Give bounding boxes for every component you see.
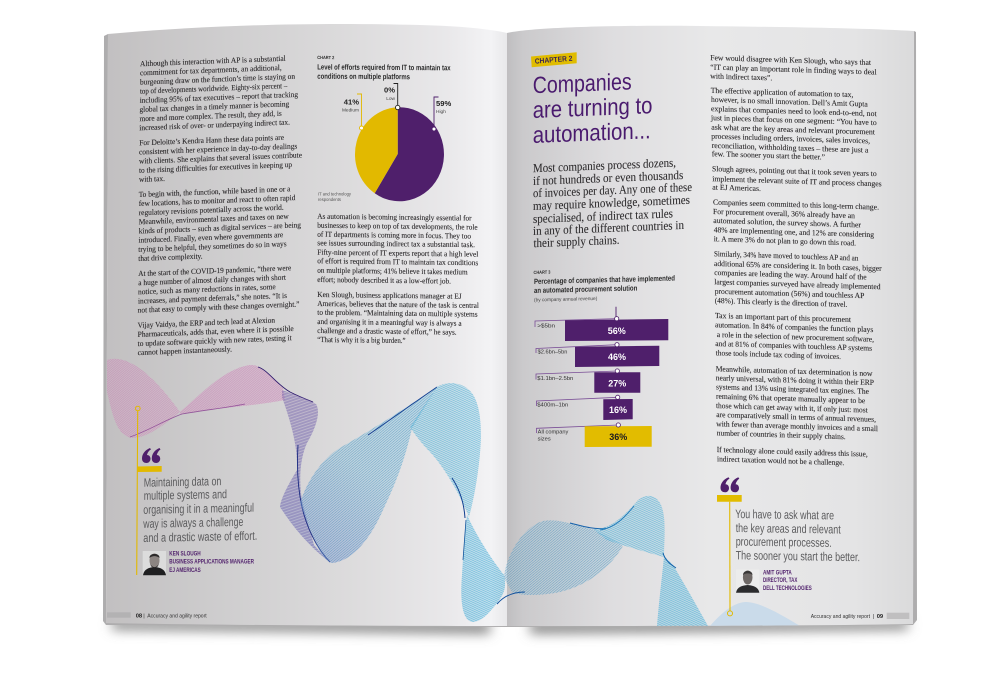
ribbon: descending band to page foot bbox=[657, 553, 708, 626]
chapter heading bbox=[533, 68, 652, 148]
bar: $1.1bn-2.5bn 27%: $1.1bn–2.5bn bbox=[537, 376, 573, 382]
portrait: Ken Slough bbox=[143, 551, 166, 575]
footer: page 08: Accuracy and agility report bbox=[147, 613, 207, 619]
attribution: Amit Gupta: DELL TECHNOLOGIES bbox=[763, 585, 812, 592]
bar: >$5bn 56%: >$5bn bbox=[537, 324, 555, 330]
paragraph: tax determination: Meanwhile, automation of tax determination is now bbox=[716, 364, 873, 378]
paragraph: monitoring revisions: that drive complexity. bbox=[138, 252, 203, 263]
callout: 0% low: 0% bbox=[384, 86, 395, 94]
paragraph: Slough agrees: at EJ Americas. bbox=[712, 183, 761, 193]
bar: $400m-1bn 16% bbox=[536, 395, 633, 420]
ribbon: blue top hump bbox=[410, 383, 481, 518]
paragraph: touchless AP: companies are leading the way. Around half of the bbox=[714, 268, 867, 282]
chart 2 footnote: IT and technology bbox=[318, 192, 352, 196]
bar: >$5bn 56%: 56% bbox=[608, 326, 626, 336]
callout: 0% low bbox=[384, 84, 400, 110]
attribution: Amit Gupta: DIRECTOR, TAX bbox=[763, 577, 798, 584]
page stack edges bbox=[103, 31, 917, 627]
paragraph: technology alone bbox=[717, 445, 868, 468]
chapter heading: are turning to bbox=[533, 92, 652, 123]
pie: medium 41% bbox=[355, 107, 398, 193]
paragraph: tax determination: those which can get away with it, if only just: most bbox=[716, 401, 868, 415]
paragraph: Kendra Hann bbox=[139, 132, 303, 184]
chart 3: funnel bars bbox=[534, 267, 675, 447]
paragraph: Slough agrees bbox=[712, 164, 882, 197]
paragraph: role of IT: Fifty-nine percent of IT experts report that a high level bbox=[317, 248, 479, 259]
footer: page 08 bbox=[107, 612, 207, 620]
paragraph: COVID-19: a huge number of almost daily changes with short bbox=[138, 273, 287, 287]
attribution: Ken Slough: BUSINESS APPLICATIONS MANAGER bbox=[169, 558, 254, 566]
paragraph: Ken Slough: Americas, believes that the nature of the task is central bbox=[317, 299, 480, 310]
paragraph: draw on time: increased risk of over- or underpaying indirect tax. bbox=[139, 118, 290, 132]
paragraph: Vijay Vaidya: Pharmaceuticals, adds that, even where it is possible bbox=[138, 324, 294, 339]
paragraph: monitoring revisions: kinds of products – such as digital services – are being bbox=[139, 220, 301, 236]
icon: quotation marks bbox=[142, 448, 160, 463]
ribbon: large blue lobe bbox=[300, 387, 437, 563]
paragraph: tax determination: systems and 13% using integrated tax engines. The bbox=[716, 382, 870, 396]
paragraph: Vijay Vaidya: Vijay Vaidya, the ERP and tech lead at Alexion bbox=[138, 316, 275, 330]
bar: $2.6bn-5bn 46%: $2.6bn–5bn bbox=[538, 350, 568, 356]
ribbon: pink left lobe bbox=[107, 359, 180, 438]
attribution: Ken Slough bbox=[169, 551, 254, 574]
ribbon: pink upper hump bbox=[130, 365, 313, 437]
callout: 41% medium bbox=[342, 94, 364, 130]
chart 3 heading: CHART 3 bbox=[534, 270, 551, 275]
ribbon: lower spine lobe bbox=[461, 515, 505, 622]
bar: all company sizes 36%: 36% bbox=[609, 432, 627, 442]
paragraph: Vijay Vaidya: to update software quickly with new rates, testing it bbox=[138, 333, 292, 348]
bar: $400m-1bn 16%: $400m–1bn bbox=[537, 402, 568, 408]
quote text: procurement processes. bbox=[736, 535, 832, 550]
paragraph: COVID-19: increases, and payment deferrals,” she notes. “It is bbox=[138, 291, 287, 306]
chart 2 heading: conditions on multiple platforms bbox=[317, 72, 410, 81]
paragraph: tax in procurement bbox=[715, 311, 874, 362]
chapter heading: automation... bbox=[533, 117, 651, 148]
paragraph: draw on time: Although this interaction with AP is a substantial bbox=[140, 54, 286, 68]
quote text: and a drastic waste of effort. bbox=[143, 529, 257, 545]
footer: page 09: Accuracy and agility report bbox=[811, 614, 870, 620]
paragraph: tax in procurement: a role in the selection of new procurement software, bbox=[717, 330, 874, 344]
quote text: You have to ask what are bbox=[735, 507, 834, 523]
paragraph: Vijay Vaidya bbox=[138, 315, 294, 357]
paragraph: long-term change: it. A mere 3% do not plan to go down this road. bbox=[714, 234, 856, 248]
paragraph: Ken Slough: to the problem. “Maintaining data on multiple systems bbox=[317, 308, 478, 319]
quote text: way is always a challenge bbox=[143, 515, 243, 531]
paragraph: Amit Gupta: reconciliation, withholding taxes – these are just a bbox=[712, 141, 869, 155]
bar: $2.6bn-5bn 46%: 46% bbox=[608, 352, 626, 362]
pie: high 59% bbox=[375, 107, 444, 201]
paragraph: role of IT bbox=[317, 212, 479, 286]
paragraph: Amit Gupta: few. The sooner you start the better.” bbox=[712, 149, 826, 162]
paragraph: technology alone: If technology alone could easily address this issue, bbox=[717, 445, 868, 459]
footer: page 08: | bbox=[143, 613, 145, 619]
paragraph: monitoring revisions: few locations, has to monitor and react to often rapid bbox=[139, 193, 295, 208]
footer: page 09: | bbox=[872, 614, 874, 620]
paragraph: Few would disagree: Few would disagree with Ken Slough, who says that bbox=[710, 53, 872, 67]
chart 3 heading: Percentage of companies that have implemented bbox=[534, 274, 675, 286]
chapter tag: CHAPTER 2 bbox=[534, 54, 573, 66]
chart 2 heading: Level of efforts required from IT to maintain tax bbox=[317, 63, 451, 72]
paragraph: tax determination: remaining 6% that operate manually appear to be bbox=[716, 392, 866, 405]
ribbon: pale foot hump bbox=[710, 602, 800, 626]
paragraph: monitoring revisions: introduced. Finally, even where governments are bbox=[138, 230, 284, 245]
quote text: The sooner you start the better. bbox=[736, 548, 860, 564]
paragraph: COVID-19: not that easy to comply with these changes overnight.” bbox=[138, 300, 300, 315]
paragraph: draw on time: commitment for tax departments, an additional, bbox=[140, 63, 282, 77]
paragraph: tax determination: number of countries in their supply chains. bbox=[717, 428, 846, 441]
ribbon: right page lobe bbox=[497, 520, 623, 604]
portrait: Amit Gupta bbox=[736, 569, 759, 593]
bar: $400m-1bn 16%: 16% bbox=[609, 405, 627, 415]
paragraph: Slough agrees: Slough agrees, pointing out that it took seven years to bbox=[712, 164, 877, 178]
paragraph: technology alone: indirect taxation would not be a challenge. bbox=[717, 454, 844, 467]
paragraph: role of IT: on multiple platforms; 41% believe it takes medium bbox=[317, 266, 468, 277]
intro paragraph: of invoices per day. Any one of these bbox=[533, 180, 692, 200]
footer: page 09: 09 bbox=[877, 614, 884, 620]
paragraph: monitoring revisions bbox=[138, 184, 301, 263]
bar: all company sizes 36%: sizes bbox=[538, 437, 551, 443]
paragraph: role of IT: of IT departments is coming more in focus. They too bbox=[317, 230, 471, 241]
text column: left page bbox=[138, 53, 303, 357]
paragraph: long-term change: automated solution, the survey shows. A further bbox=[713, 216, 861, 229]
quote text bbox=[735, 507, 860, 564]
magazine spread bbox=[103, 24, 917, 627]
quote text: Maintaining data on bbox=[144, 474, 221, 490]
paragraph: long-term change: Companies seem committed to this long-term change. bbox=[713, 198, 879, 212]
paragraph: tax in procurement: and at 81% of companies with touchless AP systems bbox=[715, 339, 872, 353]
bar: all company sizes 36%: All company bbox=[538, 430, 569, 436]
text column: right page bbox=[710, 53, 882, 468]
paragraph: tax in procurement: automation. In 84% of companies the function plays bbox=[715, 320, 873, 334]
paragraph: Kendra Hann: to the rising difficulties for executives in keeping up bbox=[139, 160, 292, 175]
paragraph: Amit Gupta: processes including orders, invoices, sales invoices, bbox=[711, 132, 870, 145]
paragraph: role of IT: of effort is required from IT to maintain tax conditions bbox=[317, 256, 478, 267]
attribution: Ken Slough: KEN SLOUGH bbox=[169, 551, 201, 558]
chart 2 heading: CHART 2 bbox=[317, 55, 335, 60]
chapter heading: Companies bbox=[533, 68, 632, 98]
intro paragraph: if not hundreds or even thousands bbox=[533, 168, 683, 188]
paragraph: monitoring revisions: Meanwhile, environmental taxes and taxes on new bbox=[139, 212, 289, 226]
quote text: the key areas and relevant bbox=[736, 521, 841, 537]
footer: page 08: 08 bbox=[136, 614, 143, 620]
paragraph: touchless AP: (48%). This clearly is the direction of travel. bbox=[715, 296, 847, 309]
paragraph: Ken Slough: Ken Slough, business applications manager at EJ bbox=[317, 290, 462, 301]
paragraph: Kendra Hann: with clients. She explains that several issues contribute bbox=[139, 150, 303, 166]
ribbon: violet descending band bbox=[280, 390, 330, 562]
paragraph: touchless AP: procurement automation (56%) and touchless AP bbox=[715, 287, 865, 300]
paragraph: Ken Slough bbox=[317, 290, 480, 346]
paragraph: Ken Slough: and organising it in a meaningful way is always a bbox=[317, 317, 462, 328]
paragraph: COVID-19: At the start of the COVID-19 pandemic, “there were bbox=[138, 263, 292, 278]
paragraph: touchless AP: largest companies surveyed have already implemented bbox=[714, 277, 881, 291]
intro paragraph: specialised, of indirect tax rules bbox=[533, 206, 673, 226]
chart 2 footnote: respondents bbox=[318, 197, 341, 202]
paragraph: draw on time: global tax changes in a timely manner is becoming bbox=[140, 99, 289, 114]
chart 2 footnote bbox=[318, 192, 352, 202]
intro paragraph: in any of the different countries in bbox=[533, 218, 684, 238]
paragraph: Few would disagree bbox=[710, 53, 877, 86]
paragraph: role of IT: effort; nobody described it as a low-effort job. bbox=[317, 275, 451, 286]
paragraph: tax determination: are comparatively small in terms of annual revenues, bbox=[716, 410, 876, 424]
bar: >$5bn 56% bbox=[535, 317, 668, 341]
attribution: Amit Gupta bbox=[763, 569, 812, 592]
paragraph: long-term change bbox=[713, 198, 879, 248]
paragraph: long-term change: For procurement overall, 36% already have an bbox=[713, 207, 855, 220]
attribution: Ken Slough: EJ AMERICAS bbox=[169, 567, 201, 574]
left page bbox=[106, 24, 507, 626]
chart 3 heading: (by company annual revenue) bbox=[534, 296, 598, 303]
paragraph: draw on time: more and more complex. The result, they add, is bbox=[140, 109, 282, 123]
quote rule with ring bbox=[717, 495, 742, 616]
text column: left page second column bbox=[317, 212, 480, 346]
bar: all company sizes 36% bbox=[536, 423, 652, 447]
right page bbox=[507, 26, 914, 626]
chart 2: pie chart with heading bbox=[317, 55, 451, 202]
paragraph: Ken Slough: challenge and a drastic waste of effort,” he says. bbox=[317, 326, 457, 337]
callout: 41% medium: Medium bbox=[342, 108, 359, 114]
paragraph: tax determination: nearly universal, with 81% doing it within their ERP bbox=[716, 373, 875, 387]
paragraph: role of IT: see issues surrounding indirect tax a substantial task. bbox=[317, 238, 475, 249]
intro paragraph bbox=[533, 155, 692, 250]
leader top bbox=[615, 307, 617, 318]
paragraph: tax in procurement: those tools include tax coding of invoices. bbox=[716, 348, 841, 361]
ribbon: right page peak bbox=[593, 496, 665, 557]
ribbon artwork bbox=[107, 359, 800, 626]
quote text: organising it in a meaningful bbox=[143, 501, 254, 517]
chart 3 heading bbox=[534, 267, 675, 303]
paragraph: COVID-19 bbox=[138, 263, 300, 315]
paragraph: Amit Gupta: The effective application of automation to tax, bbox=[711, 86, 853, 99]
paragraph: Vijay Vaidya: cannot happen instantaneously. bbox=[138, 345, 232, 357]
paragraph: Few would disagree: “IT can play an important role in finding ways to deal bbox=[710, 63, 877, 77]
quote text: multiple systems and bbox=[144, 487, 227, 503]
drop shadow bbox=[112, 620, 908, 633]
paragraph: tax determination bbox=[716, 364, 879, 442]
paragraph: tax determination: with fewer than average monthly invoices and a small bbox=[716, 419, 879, 433]
paragraph: touchless AP bbox=[714, 249, 882, 310]
footer: page 09 bbox=[811, 613, 909, 620]
paragraph: tax in procurement: Tax is an important part of this procurement bbox=[715, 311, 852, 324]
bar: $1.1bn-2.5bn 27%: 27% bbox=[608, 378, 626, 388]
pull quote: Amit Gupta bbox=[717, 477, 860, 616]
paragraph: role of IT: As automation is becoming increasingly essential for bbox=[317, 212, 472, 223]
paragraph: Ken Slough: “That is why it is a big burden.” bbox=[317, 335, 406, 345]
callout: 59% high: 59% bbox=[436, 99, 451, 108]
paragraph: monitoring revisions: To begin with, the function, while based in one or a bbox=[139, 184, 291, 199]
attribution: Amit Gupta: AMIT GUPTA bbox=[763, 569, 792, 576]
paragraph: Slough agrees: implement the relevant suite of IT and process changes bbox=[712, 174, 882, 188]
pull quote: Ken Slough bbox=[136, 406, 257, 575]
paragraph: monitoring revisions: regulatory revisions potentially across the world. bbox=[139, 203, 284, 217]
paragraph: Amit Gupta bbox=[710, 86, 878, 163]
paragraph: COVID-19: notice, such as many reductions in rates, some bbox=[138, 282, 276, 296]
paragraph: role of IT: businesses to keep on top of tax developments, the role bbox=[317, 221, 478, 232]
paragraph: draw on time: top of developments worldwide. Eighty-six percent – bbox=[140, 81, 287, 96]
icon: quotation marks bbox=[720, 477, 739, 492]
chart 2 heading bbox=[317, 55, 451, 82]
chart 3 heading: an automated procurement solution bbox=[534, 283, 638, 295]
callout: 59% high: High bbox=[436, 109, 446, 115]
bar: $1.1bn-2.5bn 27% bbox=[536, 369, 640, 393]
paragraph: draw on time: including 95% of tax executives – report that tracking bbox=[140, 90, 298, 105]
intro paragraph: Most companies process dozens, bbox=[533, 156, 676, 175]
paragraph: draw on time: burgeoning draw on the function’s time is staying on bbox=[140, 72, 295, 87]
bar: $2.6bn-5bn 46% bbox=[536, 343, 659, 367]
callout: 41% medium: 41% bbox=[344, 98, 359, 106]
paragraph: touchless AP: additional 65% are considering it. In both cases, bigger bbox=[714, 259, 882, 273]
paragraph: Few would disagree: with indirect taxes”. bbox=[710, 72, 772, 82]
paragraph: Amit Gupta: explains that companies need to look end-to-end, not bbox=[711, 104, 878, 118]
paragraph: long-term change: 48% are implementing one, and 12% are considering bbox=[714, 225, 874, 239]
paragraph: touchless AP: Similarly, 34% have moved to touchless AP and an bbox=[714, 249, 858, 263]
paragraph: Amit Gupta: ask what are the key areas and relevant procurement bbox=[711, 123, 876, 137]
paragraph: Kendra Hann: For Deloitte’s Kendra Hann these data points are bbox=[139, 133, 285, 147]
quote rule with ring bbox=[136, 406, 162, 575]
paragraph: draw on time bbox=[139, 53, 298, 132]
paragraph: Amit Gupta: however, is no small innovation. Dell’s Amit Gupta bbox=[711, 95, 868, 109]
callout: 0% low: Low bbox=[386, 96, 396, 102]
paragraph: Kendra Hann: consistent with her experience in day-to-day dealings bbox=[139, 142, 297, 157]
intro paragraph: may require knowledge, sometimes bbox=[533, 193, 690, 213]
quote text bbox=[143, 473, 257, 545]
paragraph: Amit Gupta: just in pieces that focus on one segment: “You have to bbox=[710, 113, 877, 127]
paragraph: monitoring revisions: trying to be helpful, they sometimes do so in ways bbox=[138, 239, 287, 254]
intro paragraph: their supply chains. bbox=[534, 233, 620, 250]
paragraph: Kendra Hann: with tax. bbox=[139, 174, 165, 184]
callout: 59% high bbox=[432, 97, 451, 131]
